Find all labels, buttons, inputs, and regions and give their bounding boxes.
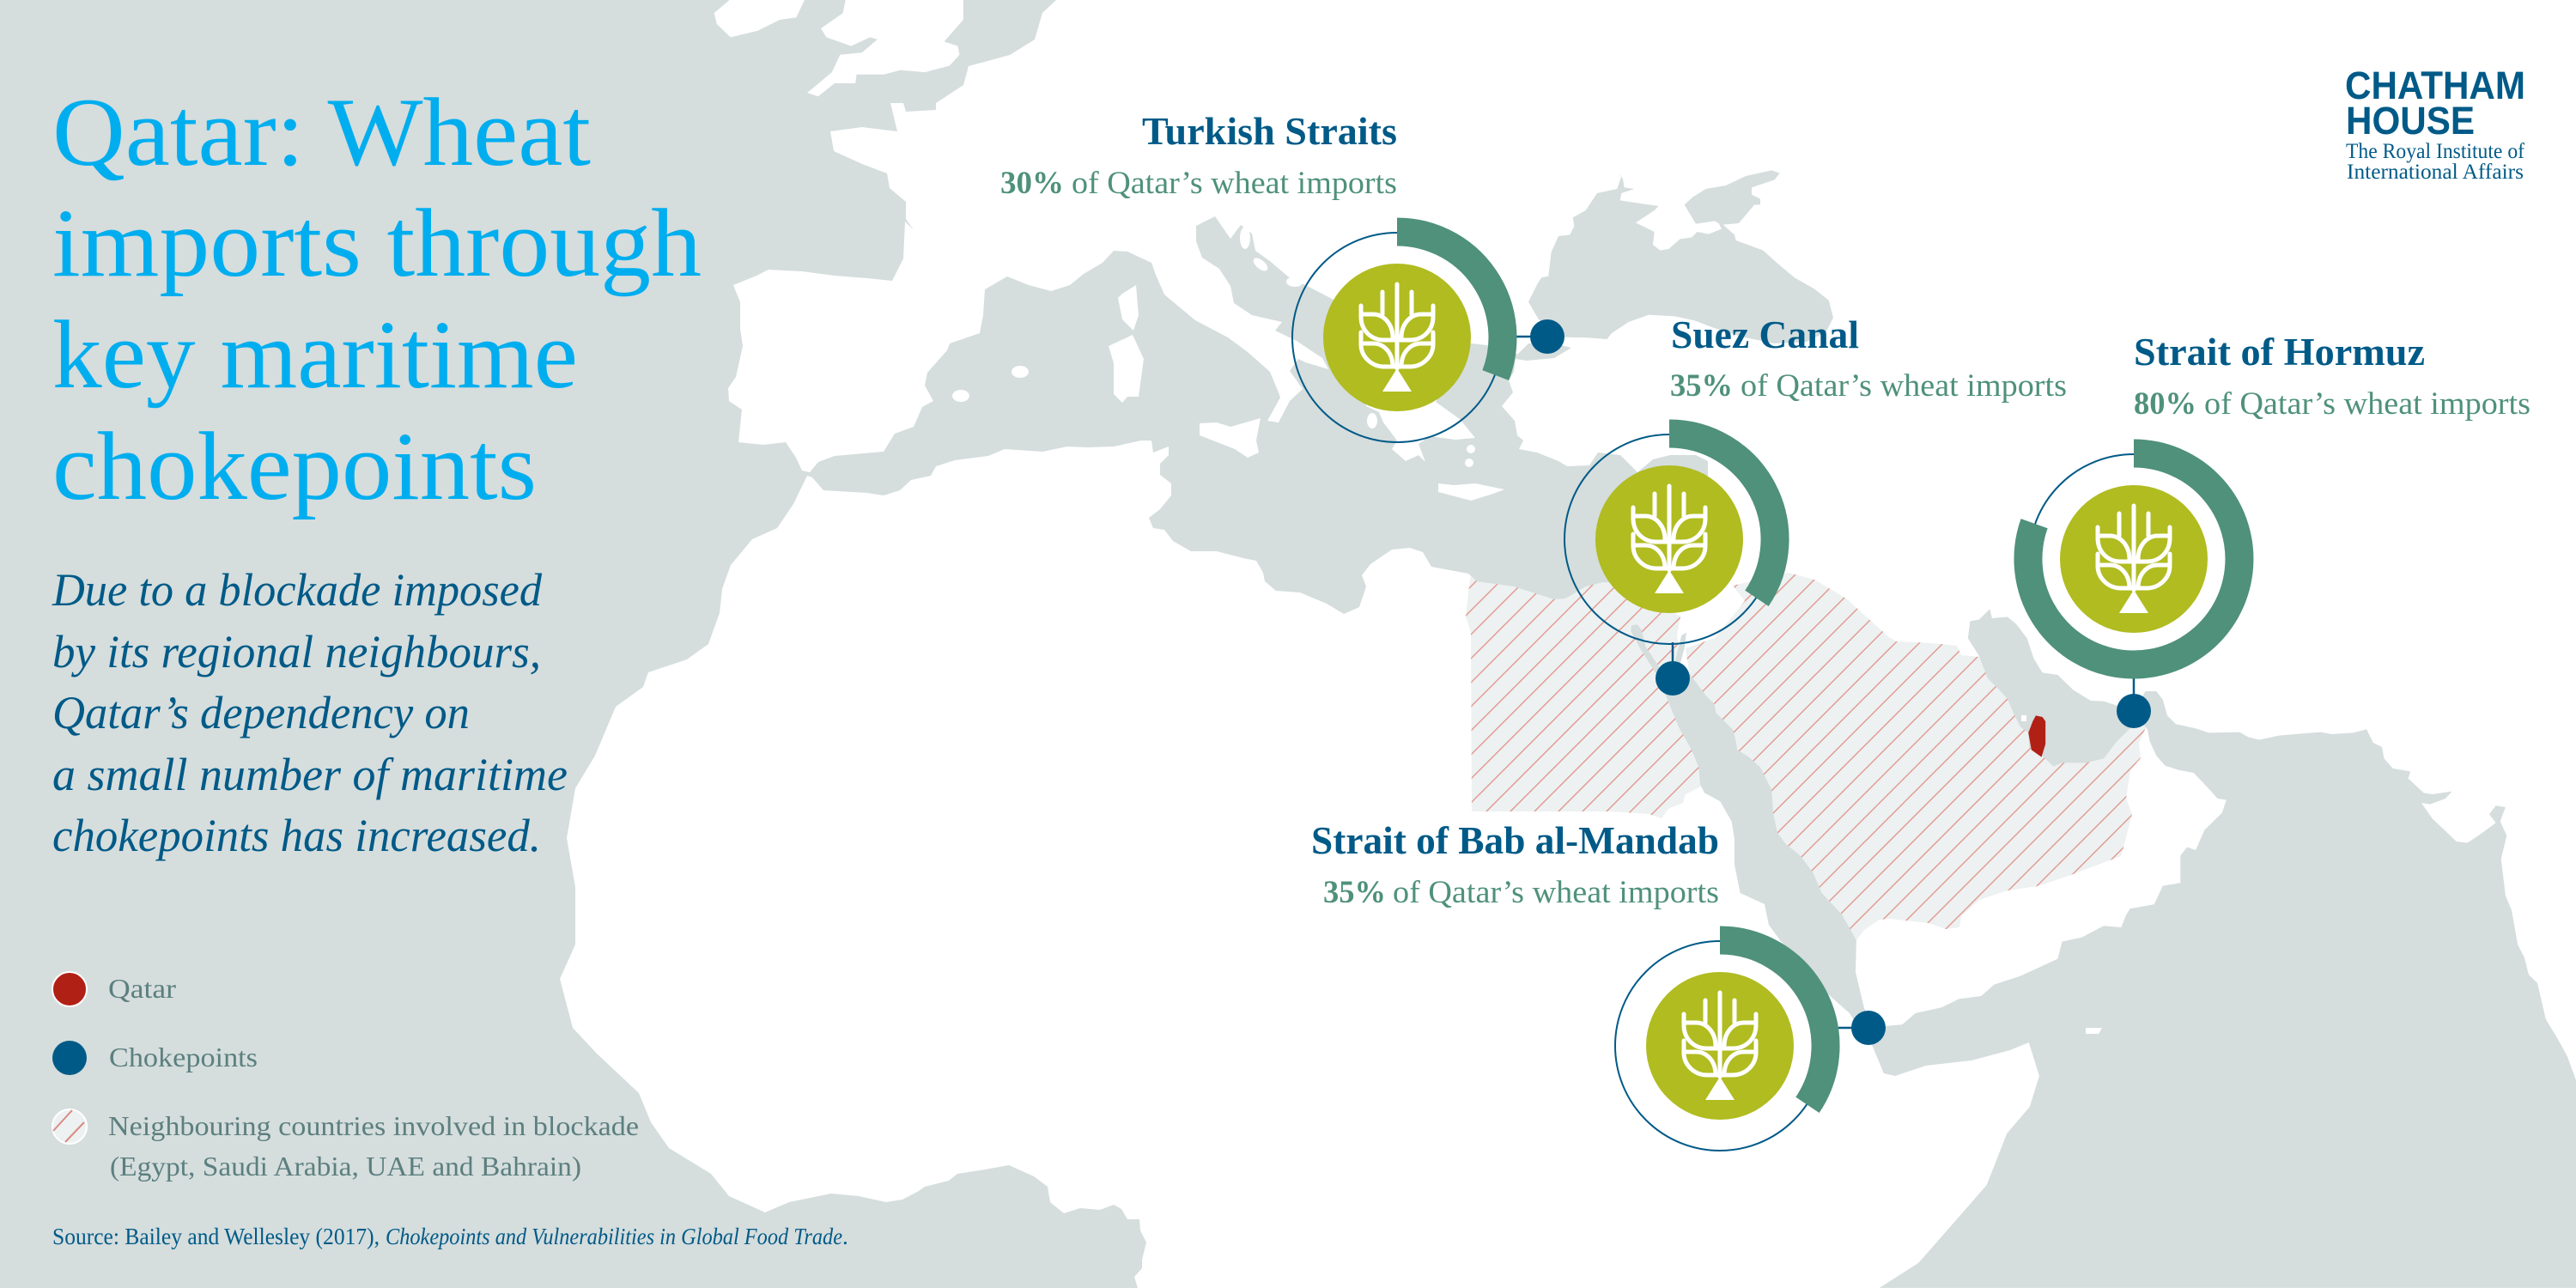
logo: Chatham House: HOUSE bbox=[2346, 99, 2475, 143]
sea: Indian Ocean and Gulf of Oman bbox=[1868, 691, 2576, 1288]
island: Socotra bbox=[2086, 1028, 2102, 1034]
label: Strait of Bab al-Mandab: Strait of Bab al-Mandab bbox=[1311, 819, 1719, 862]
legend label: chokepoints: Chokepoints bbox=[109, 1042, 258, 1072]
connector bbox=[1672, 642, 1674, 678]
islands: Ireland and Great Britain bbox=[714, 0, 963, 96]
donut: Strait of Bab al-Mandab bbox=[1615, 940, 1886, 1151]
intro text: a small number of maritime bbox=[52, 749, 568, 800]
island: Bahrain bbox=[2021, 715, 2026, 721]
label: Turkish Straits: 30% bbox=[1000, 166, 1064, 201]
title: imports through bbox=[52, 190, 702, 297]
legend label: neighbouring countries: Neighbouring countries involved in blockade bbox=[108, 1110, 639, 1141]
label: Strait of Bab al-Mandab: 35% bbox=[1323, 875, 1386, 910]
icon: wheat bbox=[2098, 506, 2170, 613]
icon: wheat bbox=[1684, 993, 1756, 1100]
source note bbox=[52, 1224, 848, 1249]
intro text bbox=[52, 564, 568, 861]
share arc 80% bbox=[2028, 453, 2239, 665]
islands: Mediterranean bbox=[952, 227, 1504, 501]
label: Turkish Straits: of Qatar’s wheat imports bbox=[1072, 166, 1397, 201]
title: chokepoints bbox=[52, 413, 537, 520]
title: Qatar: Wheat bbox=[52, 79, 591, 186]
sea: Gulf of Suez bbox=[1631, 624, 1663, 676]
outer ring bbox=[1292, 233, 1502, 442]
chokepoint dot bbox=[1530, 319, 1564, 354]
sea: Atlantic and Mediterranean bbox=[0, 0, 1708, 1288]
intro text: Qatar’s dependency on bbox=[52, 687, 470, 738]
logo: Chatham House: CHATHAM bbox=[2345, 64, 2525, 107]
legend swatch: Qatar bbox=[52, 972, 87, 1006]
icon disc bbox=[1595, 465, 1743, 613]
source note: Chokepoints and Vulnerabilities in Global Food Trade bbox=[386, 1224, 842, 1249]
share arc 30% bbox=[1397, 232, 1503, 375]
sea: Gulf of Aqaba bbox=[1674, 633, 1686, 664]
donut: Turkish Straits bbox=[1292, 232, 1564, 442]
label: Turkish Straits: Turkish Straits bbox=[1142, 110, 1397, 153]
chokepoint dot bbox=[1851, 1011, 1886, 1045]
label: Strait of Hormuz: 80% bbox=[2134, 386, 2196, 422]
outer ring bbox=[2029, 454, 2239, 664]
icon: wheat bbox=[1361, 284, 1433, 392]
legend label: neighbouring countries: (Egypt, Saudi Arabia, UAE and Bahrain) bbox=[110, 1151, 581, 1182]
icon disc bbox=[2060, 485, 2208, 633]
label: Suez Canal: of Qatar’s wheat imports bbox=[1741, 368, 2067, 404]
sea: Persian Gulf bbox=[1968, 609, 2148, 767]
logo: Chatham House bbox=[2345, 64, 2525, 184]
share arc 35% bbox=[1720, 940, 1826, 1105]
logo: Chatham House: International Affairs bbox=[2347, 161, 2524, 184]
legend label: Qatar: Qatar bbox=[108, 973, 176, 1004]
icon disc bbox=[1323, 264, 1471, 411]
legend swatch: neighbouring countries bbox=[52, 1109, 87, 1144]
source note: . bbox=[842, 1224, 848, 1249]
label: Suez Canal: Suez Canal bbox=[1671, 313, 1859, 356]
legend swatch: chokepoints bbox=[52, 1041, 87, 1075]
label: Strait of Hormuz: Strait of Hormuz bbox=[2134, 331, 2425, 374]
label: Suez Canal bbox=[1670, 313, 2067, 404]
title bbox=[52, 79, 702, 520]
donut: Strait of Hormuz bbox=[2028, 453, 2239, 728]
title: key maritime bbox=[52, 301, 578, 409]
logo: Chatham House: The Royal Institute of bbox=[2346, 140, 2525, 163]
sea: Red Sea bbox=[1657, 661, 1874, 1042]
chokepoint dot bbox=[1656, 661, 1690, 696]
chokepoint dot bbox=[2117, 694, 2151, 728]
label: Turkish Straits bbox=[1000, 110, 1397, 201]
connector bbox=[1516, 336, 1547, 337]
outer ring bbox=[1564, 434, 1774, 644]
icon: wheat bbox=[1633, 486, 1705, 593]
label: Strait of Hormuz: of Qatar’s wheat imports bbox=[2204, 386, 2530, 422]
country: Qatar bbox=[2028, 715, 2045, 757]
legend label: neighbouring countries bbox=[108, 1110, 639, 1182]
intro text: by its regional neighbours, bbox=[52, 626, 541, 677]
hatched area: Egypt bbox=[1466, 575, 1709, 818]
icon disc bbox=[1646, 972, 1794, 1120]
label: Strait of Hormuz bbox=[2134, 331, 2530, 422]
share arc 35% bbox=[1669, 434, 1775, 598]
label: Suez Canal: 35% bbox=[1670, 368, 1733, 404]
intro text: chokepoints has increased. bbox=[52, 810, 541, 861]
label: Strait of Bab al-Mandab: of Qatar’s wheat imports bbox=[1393, 875, 1719, 910]
donut: Suez Canal bbox=[1564, 434, 1775, 696]
intro text: Due to a blockade imposed bbox=[52, 564, 543, 616]
sea: Black Sea bbox=[1528, 170, 1833, 343]
legend bbox=[52, 972, 639, 1182]
source note: Source: Bailey and Wellesley (2017), bbox=[52, 1224, 380, 1249]
outer ring bbox=[1615, 941, 1825, 1151]
connector bbox=[2133, 678, 2135, 711]
label: Strait of Bab al-Mandab bbox=[1311, 819, 1719, 910]
hatched area: Saudi Arabia, UAE and Bahrain bbox=[1686, 573, 2148, 940]
connector bbox=[1838, 1027, 1868, 1029]
